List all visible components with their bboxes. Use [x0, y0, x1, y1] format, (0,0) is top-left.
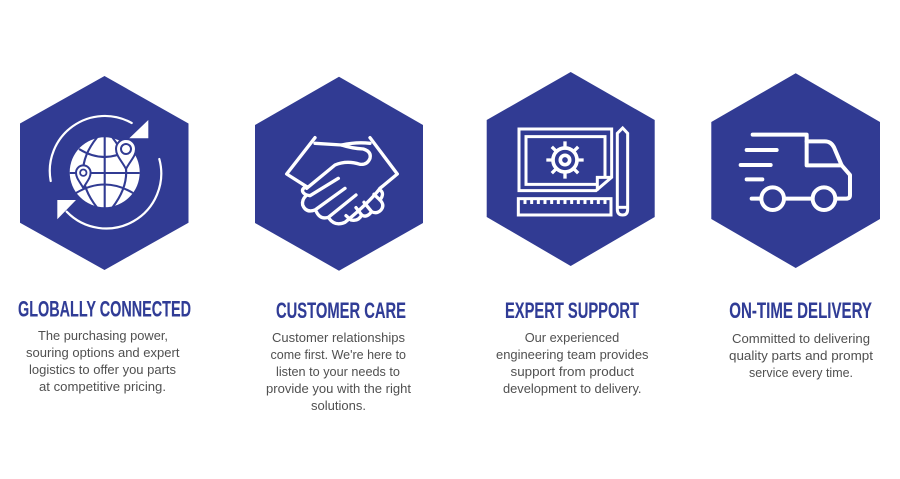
text: customer care: listen to your needs to [276, 364, 400, 379]
icon: blueprint with gear, ruler and pencil [518, 128, 628, 215]
hexagon: expert support [487, 72, 655, 266]
panel: customer care [255, 77, 423, 413]
text: globally connected: at competitive pricing. [39, 379, 166, 394]
panel: globally connected [18, 76, 191, 394]
text: expert support: engineering team provides [496, 347, 649, 362]
text: expert support: Our experienced [525, 330, 619, 345]
text: on-time delivery: service every time. [749, 365, 853, 380]
text: on-time delivery: quality parts and prompt [729, 348, 873, 363]
text: on-time delivery [729, 331, 873, 380]
text: expert support: support from product [510, 364, 634, 379]
text: expert support [496, 330, 649, 396]
icon: handshake [287, 138, 397, 224]
text: customer care [266, 330, 411, 413]
text: globally connected: The purchasing power, [38, 328, 168, 343]
text: globally connected [26, 328, 180, 394]
text: customer care: provide you with the right [266, 381, 411, 396]
heading: customer care: CUSTOMER CARE [276, 298, 406, 323]
heading: globally connected: GLOBALLY CONNECTED [18, 296, 191, 322]
hexagon: on-time delivery [711, 73, 880, 268]
text: expert support: development to delivery. [503, 381, 642, 396]
hexagon: customer care [255, 77, 423, 271]
heading: expert support: EXPERT SUPPORT [505, 298, 639, 323]
icon: delivery truck [741, 135, 850, 210]
text: globally connected: souring options and expert [26, 345, 180, 360]
hexagon: globally connected [20, 76, 188, 270]
text: globally connected: logistics to offer you parts [29, 362, 176, 377]
panel: expert support [487, 72, 655, 396]
panel: on-time delivery [711, 73, 880, 380]
text: customer care: solutions. [311, 398, 366, 413]
text: customer care: come first. We're here to [270, 347, 406, 362]
text: customer care: Customer relationships [272, 330, 405, 345]
icon: globe with arrows and pins [50, 116, 161, 228]
text: on-time delivery: Committed to delivering [732, 331, 870, 346]
